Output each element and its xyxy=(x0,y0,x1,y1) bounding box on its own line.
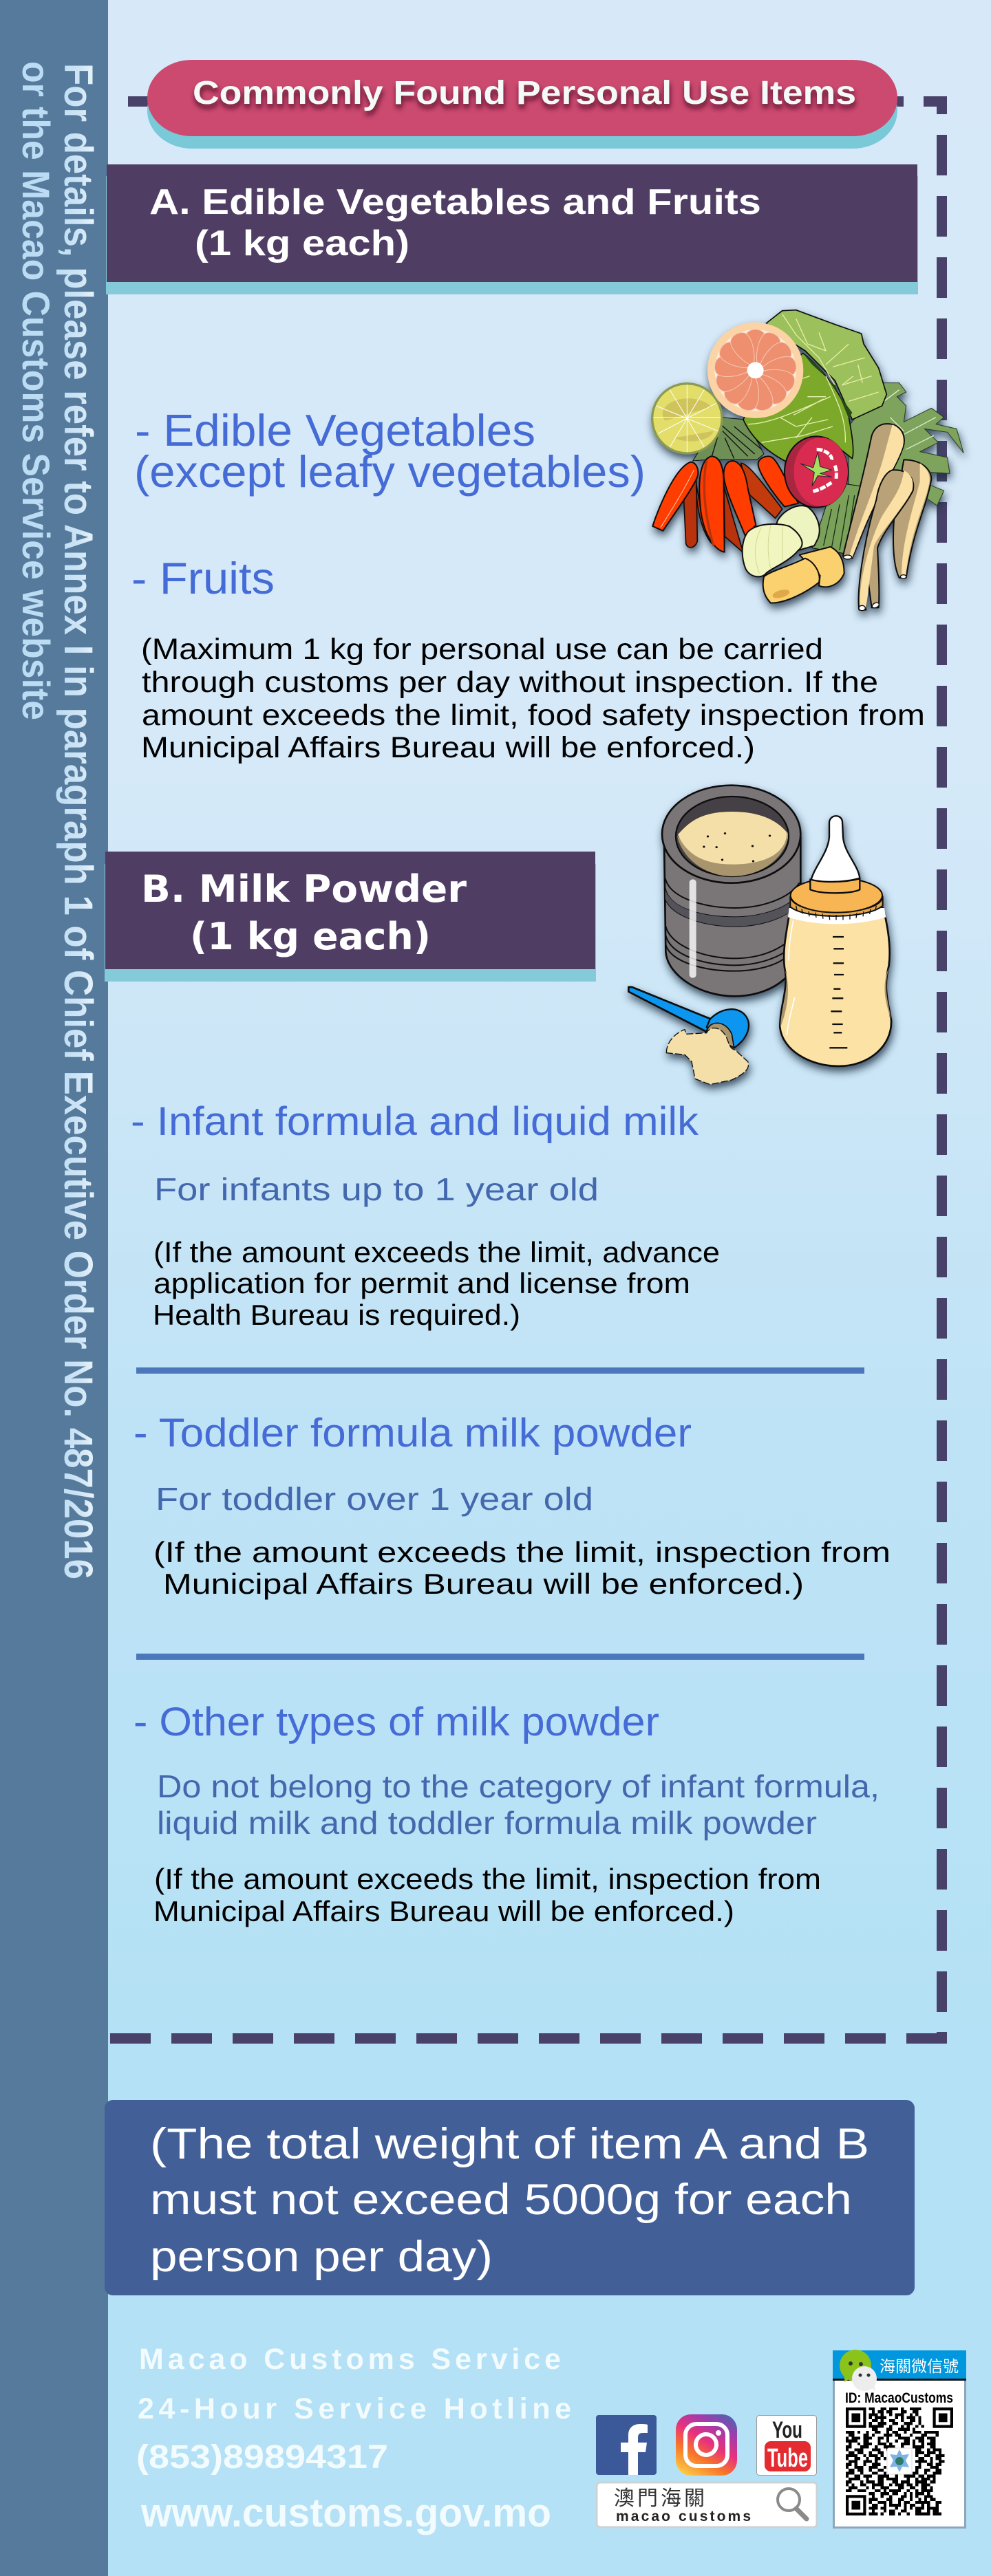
wechat QR card: 海關微信號 xyxy=(880,2353,959,2377)
item: toddler formula: - Toddler formula milk powder xyxy=(134,1411,692,1455)
item: infant formula: application for permit and license from xyxy=(153,1267,690,1299)
total weight callout: must not exceed 5000g for each xyxy=(150,2176,852,2224)
icon: youtube xyxy=(757,2416,816,2475)
icon: youtube: Tube xyxy=(767,2444,808,2473)
search box: macao customs: macao customs xyxy=(616,2509,751,2524)
section B header: (1 kg each) xyxy=(190,915,431,958)
search box: macao customs xyxy=(597,2481,817,2527)
item: infant formula: For infants up to 1 year old xyxy=(154,1171,599,1207)
item: infant formula: - Infant formula and liquid milk xyxy=(131,1099,699,1144)
section A item list: - Fruits xyxy=(131,553,275,603)
item: toddler formula: (If the amount exceeds the limit, inspection from xyxy=(153,1536,891,1568)
item: toddler formula xyxy=(134,1411,891,1600)
item: toddler formula: For toddler over 1 year old xyxy=(156,1481,593,1517)
contact details: Macao Customs Service xyxy=(139,2343,561,2376)
icon: facebook xyxy=(596,2415,657,2475)
section B header xyxy=(105,852,596,982)
section A item list xyxy=(131,405,646,603)
item: infant formula: (If the amount exceeds the limit, advance xyxy=(153,1236,720,1268)
item: other milk powder xyxy=(134,1700,880,1927)
item: other milk powder: Municipal Affairs Bureau will be enforced.) xyxy=(153,1895,734,1927)
section B header: B. Milk Powder xyxy=(141,867,467,911)
section A note: through customs per day without inspection. If the xyxy=(142,666,878,699)
item: other milk powder: - Other types of milk powder xyxy=(134,1700,659,1744)
section A note: amount exceeds the limit, food safety inspection from xyxy=(142,699,925,732)
sidebar note line 2: or the Macao Customs Service website xyxy=(14,61,58,720)
customs emblem xyxy=(887,2448,912,2474)
icon: youtube: You xyxy=(772,2417,802,2443)
section A note: Municipal Affairs Bureau will be enforced.) xyxy=(141,731,755,764)
item: infant formula: Health Bureau is required.) xyxy=(153,1299,520,1331)
total weight callout xyxy=(105,2100,915,2295)
icon: wechat bubbles xyxy=(840,2350,877,2391)
item: other milk powder: liquid milk and toddler formula milk powder xyxy=(157,1805,817,1841)
section A header: A. Edible Vegetables and Fruits xyxy=(149,182,761,222)
wechat QR card: ID: MacaoCustoms xyxy=(845,2390,953,2406)
title text: Commonly Found Personal Use Items xyxy=(193,75,856,111)
search box: macao customs: 澳門海關 xyxy=(614,2481,705,2511)
illustration: vegetables and fruits xyxy=(651,310,963,611)
item: other milk powder: Do not belong to the category of infant formula, xyxy=(157,1768,880,1804)
section A note xyxy=(141,633,925,764)
sidebar note line 1: For details, please refer to Annex I in paragraph 1 of Chief Executive Order No. 487/2016 xyxy=(56,63,100,1579)
contact details: (853)89894317 xyxy=(136,2439,388,2476)
illustration: milk powder can, bottle and scoop xyxy=(628,786,891,1085)
sidebar panel xyxy=(0,0,108,2576)
item: other milk powder: (If the amount exceeds the limit, inspection from xyxy=(154,1863,821,1895)
contact details: 24-Hour Service Hotline xyxy=(138,2392,571,2425)
section A item list: - Edible Vegetables xyxy=(135,405,535,455)
icon: instagram xyxy=(676,2414,737,2476)
dashed frame xyxy=(110,96,947,2044)
total weight callout: (The total weight of item A and B xyxy=(150,2120,869,2168)
section A header: (1 kg each) xyxy=(195,224,409,263)
contact details xyxy=(136,2343,571,2535)
QR code xyxy=(846,2407,953,2515)
wechat QR card xyxy=(833,2350,966,2529)
item: toddler formula: Municipal Affairs Bureau will be enforced.) xyxy=(163,1568,804,1600)
total weight callout: person per day) xyxy=(150,2233,493,2281)
section A note: (Maximum 1 kg for personal use can be carried xyxy=(141,633,823,666)
section A item list: (except leafy vegetables) xyxy=(134,446,646,497)
item: infant formula xyxy=(131,1099,720,1331)
section A header xyxy=(106,164,918,294)
contact details: www.customs.gov.mo xyxy=(140,2491,551,2535)
title pill xyxy=(147,60,897,149)
